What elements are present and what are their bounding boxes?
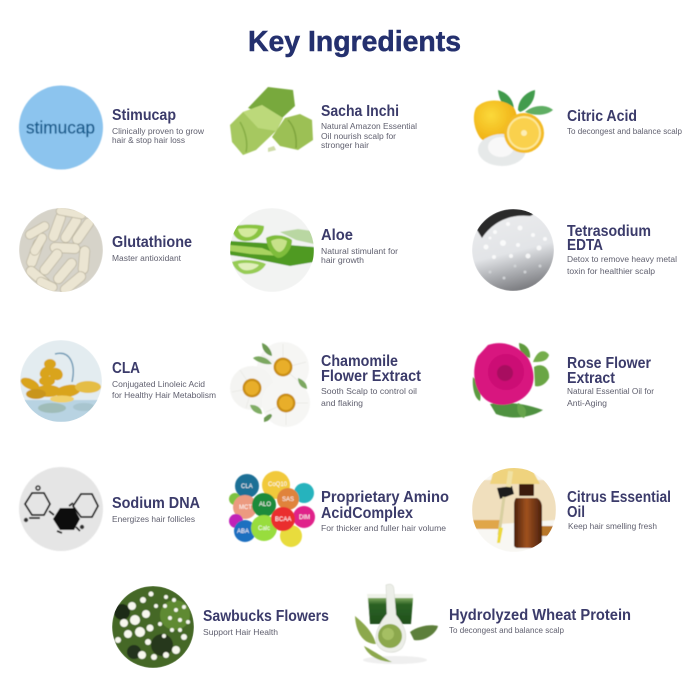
ingredient: Stimucap xyxy=(19,86,205,170)
text: Sacha Inchi xyxy=(321,103,417,150)
icon: EDTA crystals xyxy=(472,209,554,291)
text: Chamomile Flower Extract: Flower Extract xyxy=(321,368,421,385)
text: Stimucap: Stimucap xyxy=(112,107,176,124)
text: Chamomile Flower Extract: Sooth Scalp to control oil xyxy=(321,386,417,396)
text: Citric Acid: Citric Acid xyxy=(567,108,637,125)
text: Hydrolyzed Wheat Protein xyxy=(449,607,631,635)
text: Glutathione: Master antioxidant xyxy=(112,253,182,263)
icon: green juice, spoon and wheat powder xyxy=(355,584,438,664)
text: Citrus Essential Oil: Keep hair smelling fresh xyxy=(568,521,657,531)
text: Rose Flower Extract: Anti-Aging xyxy=(567,398,607,408)
text: Rose Flower Extract: Natural Essential Oil for xyxy=(567,386,654,396)
icon: colourful amino acid bubbles: ALO xyxy=(259,502,271,508)
text: Rose Flower Extract: Extract xyxy=(567,370,615,387)
icon: colourful amino acid bubbles: BCAA xyxy=(275,517,291,523)
text: Tetrasodium EDTA: EDTA xyxy=(567,237,603,254)
icon: colourful amino acid bubbles: DIM xyxy=(299,515,310,521)
ingredient: Sacha Inchi xyxy=(230,87,417,155)
text: Citrus Essential Oil: Oil xyxy=(567,504,585,521)
icon: sacha inchi pods xyxy=(230,87,313,155)
text: Aloe xyxy=(321,227,398,265)
icon: stimucap logo xyxy=(19,86,103,170)
title: Key Ingredients xyxy=(248,26,461,58)
text: Aloe: Aloe xyxy=(321,227,353,244)
icon: colourful amino acid bubbles: Calc xyxy=(258,526,270,532)
text: Sodium DNA: Sodium DNA xyxy=(112,495,200,512)
ingredient: Chamomile Flower Extract xyxy=(230,342,421,427)
text: CLA: for Healthy Hair Metabolism xyxy=(112,390,216,400)
text: Tetrasodium EDTA: toxin for healthier scalp xyxy=(567,266,655,276)
ingredient: Rose Flower Extract xyxy=(473,343,654,418)
text: Proprietary Amino AcidComplex xyxy=(321,489,449,533)
icon: colourful amino acid bubbles: CLA xyxy=(241,484,253,490)
text: CLA xyxy=(112,360,216,400)
icon: softgel capsules xyxy=(19,340,104,422)
text: CLA: Conjugated Linoleic Acid xyxy=(112,379,205,389)
text: Sacha Inchi: Natural Amazon Essential xyxy=(321,121,417,131)
icon: pink rose xyxy=(473,343,549,418)
text: Citric Acid: To decongest and balance scalp xyxy=(567,126,682,136)
text: Sodium DNA xyxy=(112,495,200,524)
text: Chamomile Flower Extract: Chamomile xyxy=(321,353,398,370)
ingredient: Aloe xyxy=(230,208,398,292)
text: CLA: CLA xyxy=(112,360,140,377)
ingredient: Tetrasodium EDTA xyxy=(472,209,677,291)
text: Sodium DNA: Energizes hair follicles xyxy=(112,514,195,524)
text: Proprietary Amino AcidComplex: AcidComplex xyxy=(321,505,413,522)
text: Sacha Inchi: stronger hair xyxy=(321,140,369,150)
text: Citric Acid xyxy=(567,108,682,136)
icon: stimucap logo: stimucap xyxy=(26,118,95,138)
text: Stimucap: Clinically proven to grow xyxy=(112,126,205,136)
text: Citrus Essential Oil: Citrus Essential xyxy=(567,489,671,506)
text: Glutathione xyxy=(112,234,192,263)
ingredient: Sodium DNA xyxy=(19,467,200,551)
icon: colourful amino acid bubbles: ABA xyxy=(237,529,249,535)
text: Rose Flower Extract: Rose Flower xyxy=(567,355,651,372)
icon: colourful amino acid bubbles: SAS xyxy=(282,497,294,503)
text: Chamomile Flower Extract xyxy=(321,353,421,408)
icon: aloe slices xyxy=(230,208,314,292)
icon: chamomile flowers xyxy=(230,342,310,427)
text: Tetrasodium EDTA: Tetrasodium xyxy=(567,223,651,240)
text: Aloe: Natural stimulant for xyxy=(321,246,398,256)
text: Tetrasodium EDTA: Detox to remove heavy metal xyxy=(567,254,677,264)
text: Hydrolyzed Wheat Protein: To decongest and balance scalp xyxy=(449,625,564,635)
text: Stimucap: hair & stop hair loss xyxy=(112,135,185,145)
text: Aloe: hair growth xyxy=(321,255,364,265)
text: Rose Flower Extract xyxy=(567,355,654,408)
ingredient: CLA xyxy=(19,340,216,422)
text: Sacha Inchi: Sacha Inchi xyxy=(321,103,399,120)
text: Sawbucks Flowers: Sawbucks Flowers xyxy=(203,608,329,625)
text: Tetrasodium EDTA xyxy=(567,223,677,276)
icon: capsules xyxy=(19,206,103,296)
text: Sawbucks Flowers xyxy=(203,608,329,637)
text: Stimucap xyxy=(112,107,205,145)
ingredient: Proprietary Amino Acid Complex xyxy=(229,471,449,547)
text: Sacha Inchi: Oil nourish scalp for xyxy=(321,131,396,141)
text: Citrus Essential Oil xyxy=(567,489,671,531)
ingredient: Sawbucks Flowers xyxy=(112,586,329,668)
ingredient: Citric Acid xyxy=(474,90,682,166)
ingredient: Citrus Essential Oil xyxy=(472,466,671,552)
text: Glutathione: Glutathione xyxy=(112,234,192,251)
icon: molecule diagram xyxy=(19,467,103,551)
icon: elderflower blossoms xyxy=(112,586,194,668)
text: Chamomile Flower Extract: and flaking xyxy=(321,398,363,408)
icon: colourful amino acid bubbles: CoQ10 xyxy=(268,482,288,488)
icon: lemon and citric acid powder xyxy=(474,90,553,166)
icon: colourful amino acid bubbles: MCT xyxy=(239,505,252,511)
text: Hydrolyzed Wheat Protein: Hydrolyzed Wheat Protein xyxy=(449,607,631,624)
icon: essential oil bottle xyxy=(472,466,558,552)
text: Sawbucks Flowers: Support Hair Health xyxy=(203,627,278,637)
text: Proprietary Amino AcidComplex: For thicker and fuller hair volume xyxy=(321,523,446,533)
text: Proprietary Amino AcidComplex: Proprietary Amino xyxy=(321,489,449,506)
ingredient: Hydrolyzed Wheat Protein xyxy=(355,584,631,664)
icon: colourful amino acid bubbles xyxy=(229,471,315,547)
ingredient: Glutathione xyxy=(19,206,192,296)
